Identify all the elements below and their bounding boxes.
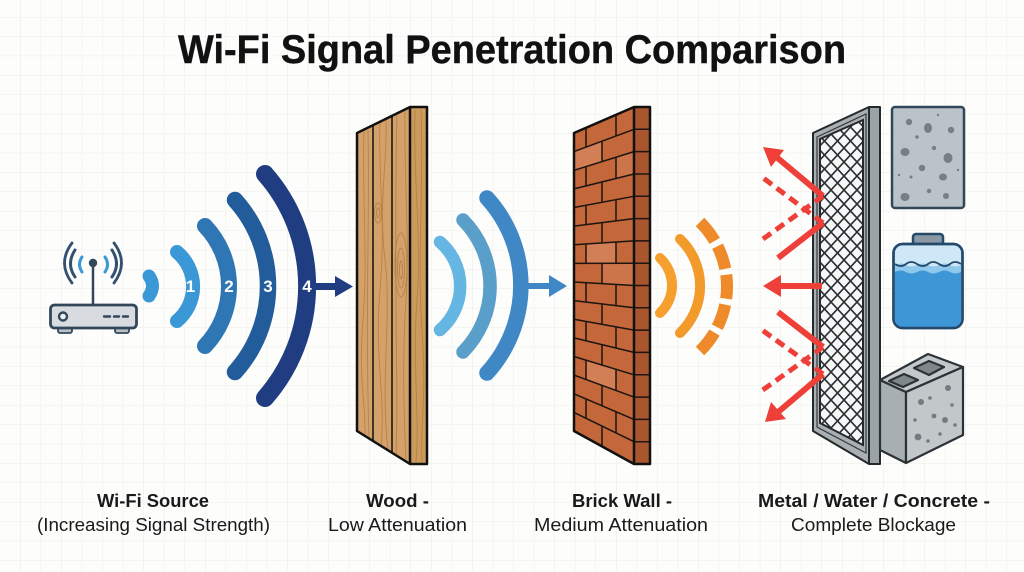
icon: router [50, 243, 136, 333]
label: brick: Brick Wall - [572, 491, 672, 511]
label: wood: Wood - [366, 491, 429, 511]
icon: cinder block [880, 354, 963, 463]
arc numbers: 1 [186, 277, 195, 296]
weak signal arcs after brick [660, 222, 727, 351]
label: brick [534, 491, 708, 535]
reduced signal arcs after wood [440, 198, 567, 373]
arrow: wood to brick [528, 275, 567, 297]
wood wall [357, 107, 427, 464]
arc numbers [186, 277, 312, 296]
arc numbers: 3 [263, 277, 273, 296]
label: wood: Low Attenuation [328, 515, 467, 535]
label: source [37, 491, 270, 535]
label: metal water concrete [758, 491, 990, 535]
label: source: Wi-Fi Source [97, 491, 209, 511]
label: wood [328, 491, 467, 535]
reflected red arrows [760, 147, 823, 422]
arrow: source to wood [312, 276, 353, 297]
metal mesh wall [813, 107, 880, 464]
arc numbers: 4 [302, 277, 312, 296]
lighter bricks [574, 141, 634, 390]
label: brick: Medium Attenuation [534, 515, 708, 535]
title: Wi-Fi Signal Penetration Comparison [178, 28, 846, 72]
signal arcs: increasing strength [149, 174, 353, 398]
label: source: (Increasing Signal Strength) [37, 515, 270, 535]
icon: water bottle [894, 234, 962, 328]
label: metal water concrete: Complete Blockage [791, 515, 956, 535]
icon: concrete slab [892, 107, 964, 208]
label: metal water concrete: Metal / Water / Concrete - [758, 491, 990, 511]
brick wall [574, 107, 650, 464]
arc numbers: 2 [224, 277, 234, 296]
